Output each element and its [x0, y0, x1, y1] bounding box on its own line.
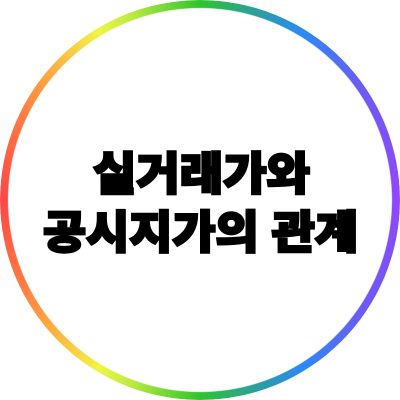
title line 1: 실거래가와 — [93, 148, 310, 200]
title line 2: 공시지가의 관계 — [43, 207, 358, 258]
